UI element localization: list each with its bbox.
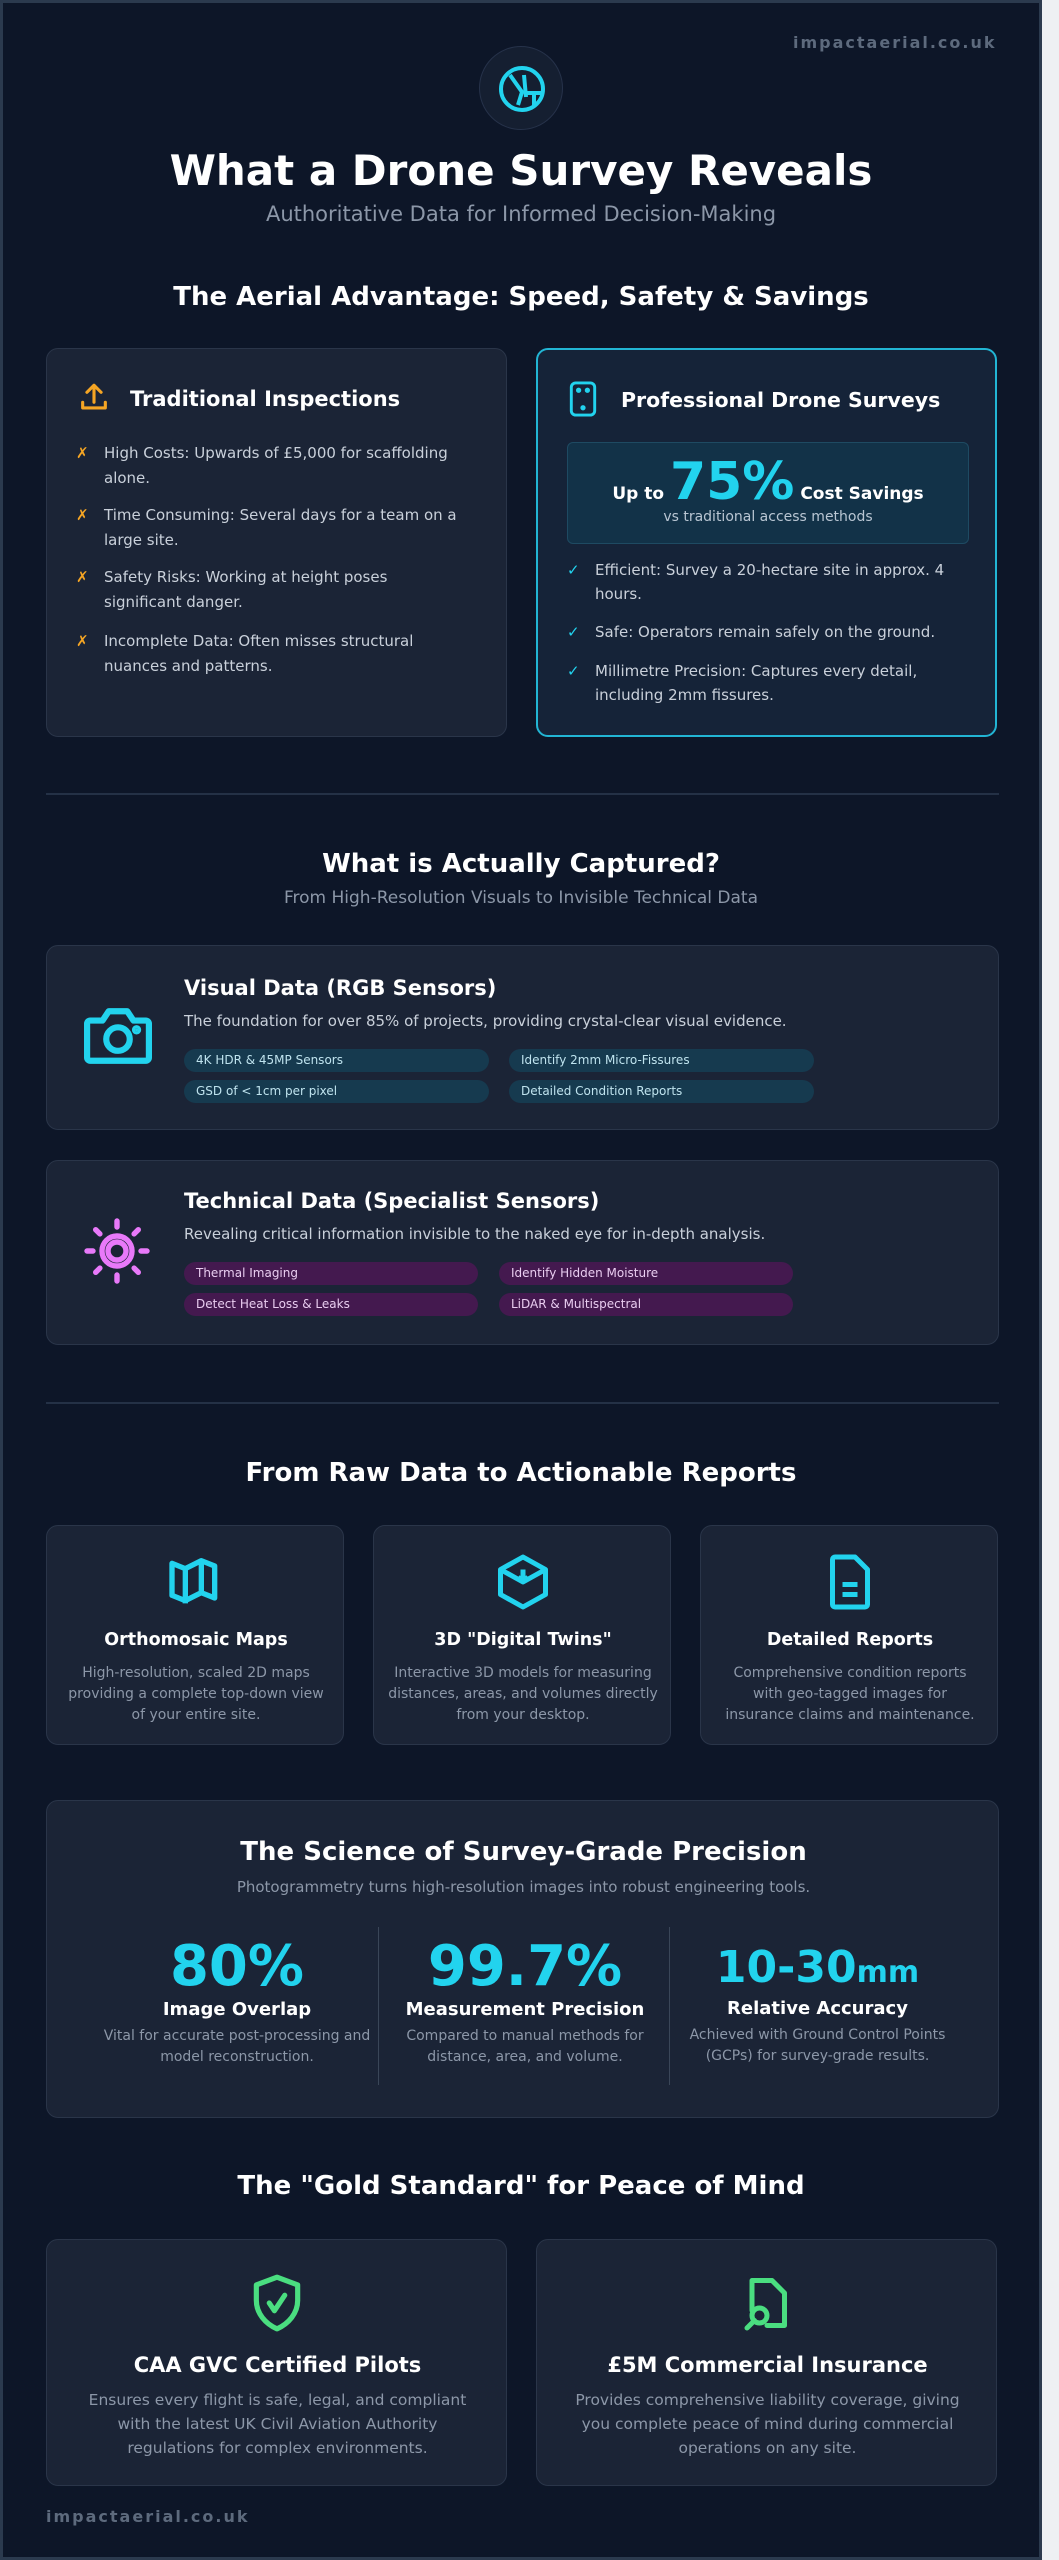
stat: 80%: Image Overlap [163, 1999, 311, 2020]
panel: traditional inspections: Incomplete Data: Often misses structural nuances and patterns. [104, 632, 413, 675]
icon: document [830, 1554, 870, 1610]
panel: technical data: Detect Heat Loss & Leaks [196, 1297, 350, 1311]
panel: traditional inspections: ✗ [76, 506, 89, 524]
stat: 10-30mm: 10-30mm [716, 1942, 919, 1993]
title: Orthomosaic Maps [104, 1630, 288, 1650]
stat: 10-30mm: Relative Accuracy [727, 1998, 908, 2019]
panel: traditional inspections: ✗ [76, 444, 89, 462]
panel: professional drone surveys: ✓ [567, 662, 580, 680]
panel: insurance [536, 2239, 997, 2486]
panel: visual data [46, 945, 999, 1130]
title: CAA GVC Certified Pilots [134, 2353, 421, 2377]
tags [184, 1049, 489, 1072]
bullets [567, 561, 944, 704]
domain top: impactaerial.co.uk [793, 33, 997, 52]
title: Technical Data (Specialist Sensors) [184, 1189, 599, 1213]
description: Comprehensive condition reports with geo-tagged images for insurance claims and maintenance. [725, 1665, 975, 1723]
callout: 75% savings: vs traditional access methods [663, 509, 873, 525]
title: Detailed Reports [767, 1630, 933, 1650]
stat: 99.7% [406, 1934, 644, 2065]
title: £5M Commercial Insurance [607, 2353, 928, 2377]
description: Provides comprehensive liability coverage, giving you complete peace of mind during commercial operations on any site. [575, 2391, 960, 2457]
subheading: From High-Resolution Visuals to Invisible Technical Data [284, 888, 758, 908]
icon: map [169, 1558, 218, 1604]
icon: logo [479, 46, 563, 130]
heading: what is captured: What is Actually Captured? [322, 849, 720, 879]
icon: drone [570, 382, 596, 416]
stat: 10-30mm [690, 1942, 945, 2064]
stat: 99.7%: 99.7% [428, 1934, 622, 1999]
footer domain: impactaerial.co.uk [46, 2507, 250, 2526]
description: Interactive 3D models for measuring distances, areas, and volumes directly from your desktop. [388, 1665, 658, 1723]
panel: traditional inspections [46, 348, 507, 737]
panel: precision [46, 1800, 999, 2118]
panel: detailed reports [700, 1525, 998, 1745]
panel: visual data: Identify 2mm Micro-Fissures [521, 1053, 690, 1067]
panel: professional drone surveys: ✓ [567, 623, 580, 641]
stat: 10-30mm: Achieved with Ground Control Points (GCPs) for survey-grade results. [690, 2027, 945, 2064]
panel: CAA certified [46, 2239, 507, 2486]
callout: 75% savings: Up to 75% Cost Savings [612, 452, 924, 512]
icon: camera [84, 1008, 152, 1064]
panel: visual data: GSD of < 1cm per pixel [196, 1084, 337, 1098]
panel: technical data: Identify Hidden Moisture [511, 1266, 658, 1280]
title: The Science of Survey-Grade Precision [240, 1837, 807, 1867]
panel: visual data: Detailed Condition Reports [521, 1084, 682, 1098]
panel: traditional inspections: ✗ [76, 632, 89, 650]
panel: orthomosaic [46, 1525, 344, 1745]
subtitle: Photogrammetry turns high-resolution images into robust engineering tools. [237, 1878, 810, 1896]
icon: shield [254, 2274, 300, 2332]
description: High-resolution, scaled 2D maps providing a complete top-down view of your entire site. [68, 1665, 324, 1723]
panel: digital twins [373, 1525, 671, 1745]
bullets [76, 444, 457, 675]
panel: traditional inspections: Time Consuming: Several days for a team on a large site. [104, 506, 457, 549]
description: Ensures every flight is safe, legal, and compliant with the latest UK Civil Aviation Authority regulations for complex environments. [89, 2391, 466, 2457]
panel: technical data [46, 1160, 999, 1345]
panel: professional drone surveys: ✓ [567, 561, 580, 579]
heading: Professional Drone Surveys [621, 388, 940, 412]
title: Visual Data (RGB Sensors) [184, 976, 496, 1000]
panel: professional drone surveys: Safe: Operators remain safely on the ground. [595, 623, 935, 641]
title: What a Drone Survey Reveals [170, 146, 872, 195]
title: 3D "Digital Twins" [434, 1630, 612, 1650]
tags: 4K HDR & 45MP Sensors [196, 1053, 343, 1067]
tags [184, 1262, 478, 1285]
stat: 99.7%: Compared to manual methods for distance, area, and volume. [406, 2028, 644, 2065]
stat: 99.7%: Measurement Precision [406, 1999, 644, 2020]
icon: upload [81, 384, 107, 410]
panel: professional drone surveys [536, 348, 997, 737]
subtitle: Authoritative Data for Informed Decision-Making [266, 202, 776, 226]
stat: 80% [104, 1934, 370, 2065]
heading: aerial advantage: The Aerial Advantage: Speed, Safety & Savings [173, 282, 869, 312]
stat: 80%: Vital for accurate post-processing and model reconstruction. [104, 2028, 370, 2065]
panel: traditional inspections: High Costs: Upwards of £5,000 for scaffolding alone. [104, 444, 448, 487]
icon: document search [744, 2278, 787, 2330]
tags: Thermal Imaging [196, 1266, 298, 1280]
panel: professional drone surveys: Millimetre Precision: Captures every detail, including 2mm fissures. [595, 662, 917, 704]
panel: professional drone surveys: Efficient: Survey a 20-hectare site in approx. 4 hours. [595, 561, 944, 603]
stat: 80%: 80% [170, 1934, 304, 1999]
icon: thermal sun [84, 1218, 150, 1284]
icon: cube [498, 1554, 548, 1610]
panel: traditional inspections: Safety Risks: Working at height poses significant danger. [104, 568, 387, 611]
description: The foundation for over 85% of projects, providing crystal-clear visual evidence. [184, 1012, 787, 1030]
callout: 75% savings [567, 442, 969, 544]
heading: gold standard: The "Gold Standard" for Peace of Mind [237, 2171, 805, 2201]
heading: raw data to reports: From Raw Data to Actionable Reports [246, 1458, 796, 1488]
heading: Traditional Inspections [130, 387, 400, 411]
panel: technical data: LiDAR & Multispectral [511, 1297, 641, 1311]
description: Revealing critical information invisible to the naked eye for in-depth analysis. [184, 1225, 765, 1243]
panel: traditional inspections: ✗ [76, 568, 89, 586]
